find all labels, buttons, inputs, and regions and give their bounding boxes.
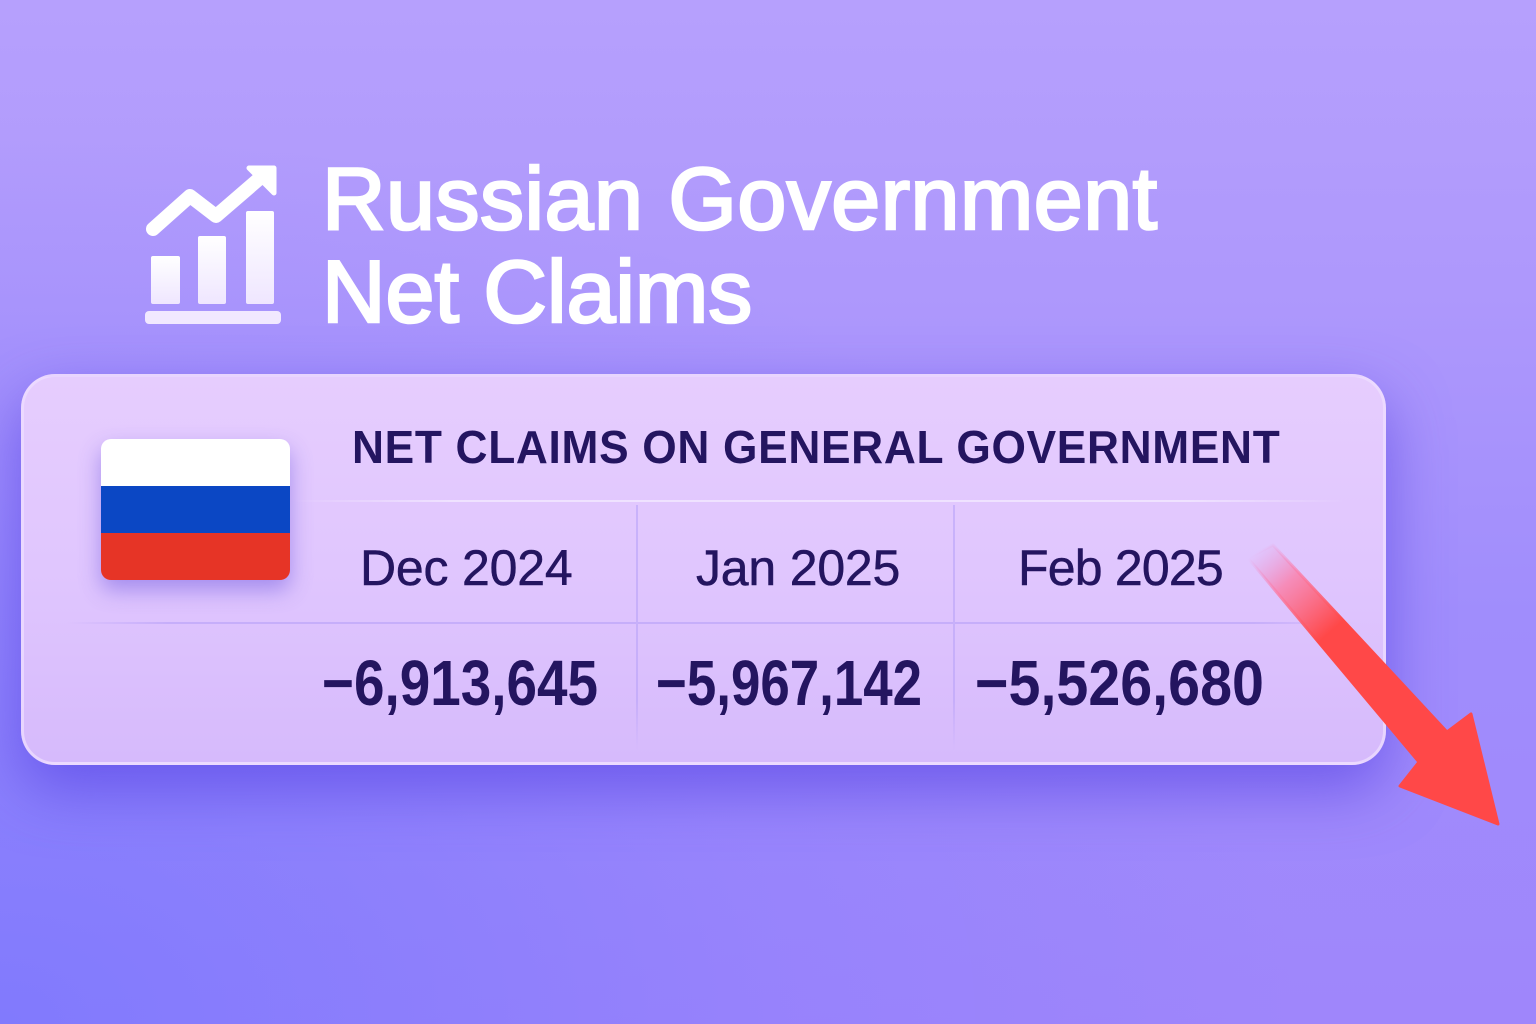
value: Jan 2025: −5,967,142 <box>656 647 922 719</box>
title <box>322 149 1158 341</box>
column header: Jan 2025: Jan 2025 <box>696 540 900 596</box>
value: Dec 2024: −6,913,645 <box>322 647 598 719</box>
title: Russian Government <box>322 149 1158 248</box>
column header: Dec 2024: Dec 2024 <box>360 540 572 596</box>
icon: rising bar chart <box>145 166 281 324</box>
panel: data table card <box>21 374 1386 765</box>
icon: Russian flag <box>101 439 290 580</box>
table heading: NET CLAIMS ON GENERAL GOVERNMENT <box>352 421 1280 473</box>
column header: Feb 2025: Feb 2025 <box>1018 540 1223 596</box>
value: Feb 2025: −5,526,680 <box>975 647 1264 719</box>
title: Net Claims <box>322 242 752 341</box>
